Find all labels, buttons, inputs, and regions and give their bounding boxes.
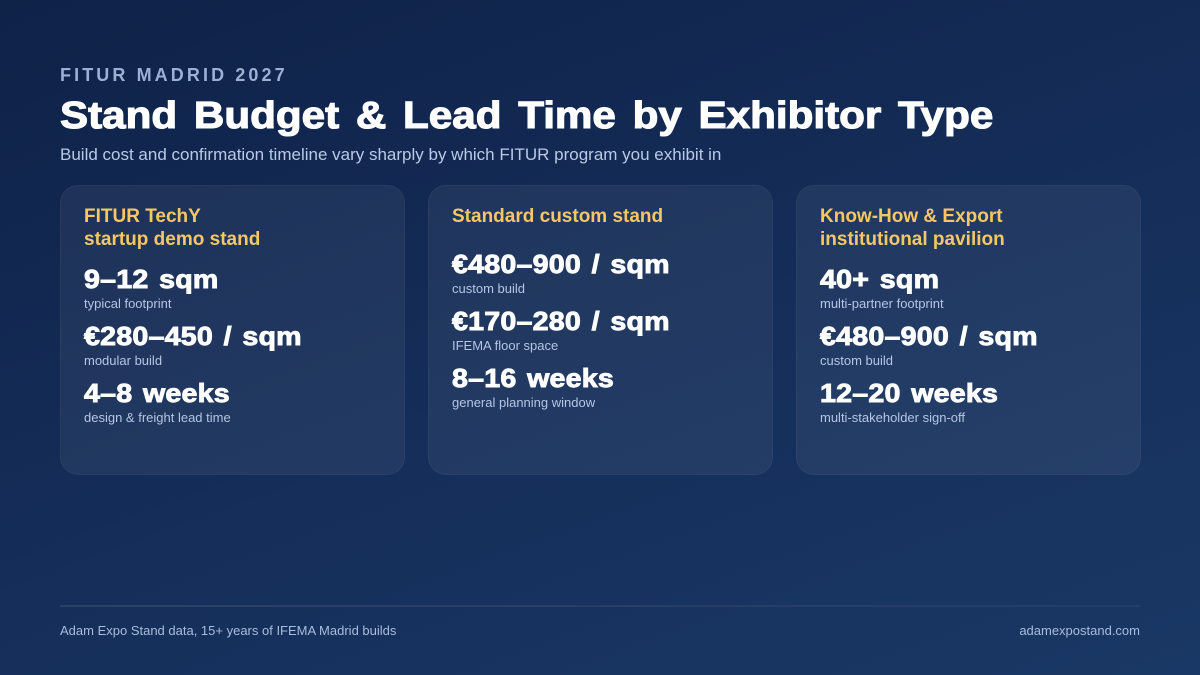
- metric: build cost: €480–900 / sqm: [820, 321, 1038, 351]
- metric: planning window: general planning window: [452, 395, 595, 410]
- metric: build cost: [84, 321, 302, 368]
- metric: build cost: [452, 249, 670, 296]
- metric: lead time: multi-stakeholder sign-off: [820, 410, 965, 425]
- title: Stand Budget & Lead Time by Exhibitor Type: [60, 95, 993, 137]
- panel: Standard custom stand: [428, 185, 773, 475]
- metric: build cost: [820, 321, 1038, 368]
- metric: build cost: modular build: [84, 353, 162, 368]
- metric: lead time: 12–20 weeks: [820, 378, 998, 408]
- metric: build cost: €280–450 / sqm: [84, 321, 302, 351]
- metric: lead time: [84, 378, 231, 425]
- heading: Know-How & Export: [820, 206, 1005, 250]
- metric: footprint: 40+ sqm: [820, 264, 939, 294]
- metric: lead time: 4–8 weeks: [84, 378, 230, 408]
- metric: floor space: [452, 306, 670, 353]
- metric: footprint: [820, 264, 944, 311]
- footer source: Adam Expo Stand data, 15+ years of IFEMA Madrid builds: [60, 623, 396, 638]
- metric: floor space: €170–280 / sqm: [452, 306, 670, 336]
- panel: FITUR TechY: [60, 185, 405, 475]
- metric: lead time: [820, 378, 998, 425]
- heading: Standard custom stand: Standard custom stand: [452, 206, 663, 227]
- metric: planning window: 8–16 weeks: [452, 363, 614, 393]
- metric: footprint: multi-partner footprint: [820, 296, 944, 311]
- metric: footprint: 9–12 sqm: [84, 264, 219, 294]
- footer website: adamexpostand.com: [1019, 623, 1140, 638]
- metric: build cost: €480–900 / sqm: [452, 249, 670, 279]
- metric: planning window: [452, 363, 614, 410]
- metric: floor space: IFEMA floor space: [452, 338, 558, 353]
- footer rule: [60, 605, 1140, 607]
- subtitle: Build cost and confirmation timeline vary sharply by which FITUR program you exhibit in: [60, 145, 721, 164]
- metric: build cost: custom build: [820, 353, 893, 368]
- panel: Know-How & Export: [796, 185, 1141, 475]
- heading: Know-How & Export: institutional pavilion: [820, 229, 1005, 250]
- heading: FITUR TechY: startup demo stand: [84, 229, 260, 250]
- metric: build cost: custom build: [452, 281, 525, 296]
- eyebrow: FITUR MADRID 2027: [60, 65, 288, 85]
- metric: lead time: design & freight lead time: [84, 410, 231, 425]
- metric: footprint: typical footprint: [84, 296, 171, 311]
- heading: FITUR TechY: [84, 206, 260, 250]
- heading: FITUR TechY: FITUR TechY: [84, 206, 201, 227]
- metric: footprint: [84, 264, 219, 311]
- heading: Know-How & Export: Know-How & Export: [820, 206, 1003, 227]
